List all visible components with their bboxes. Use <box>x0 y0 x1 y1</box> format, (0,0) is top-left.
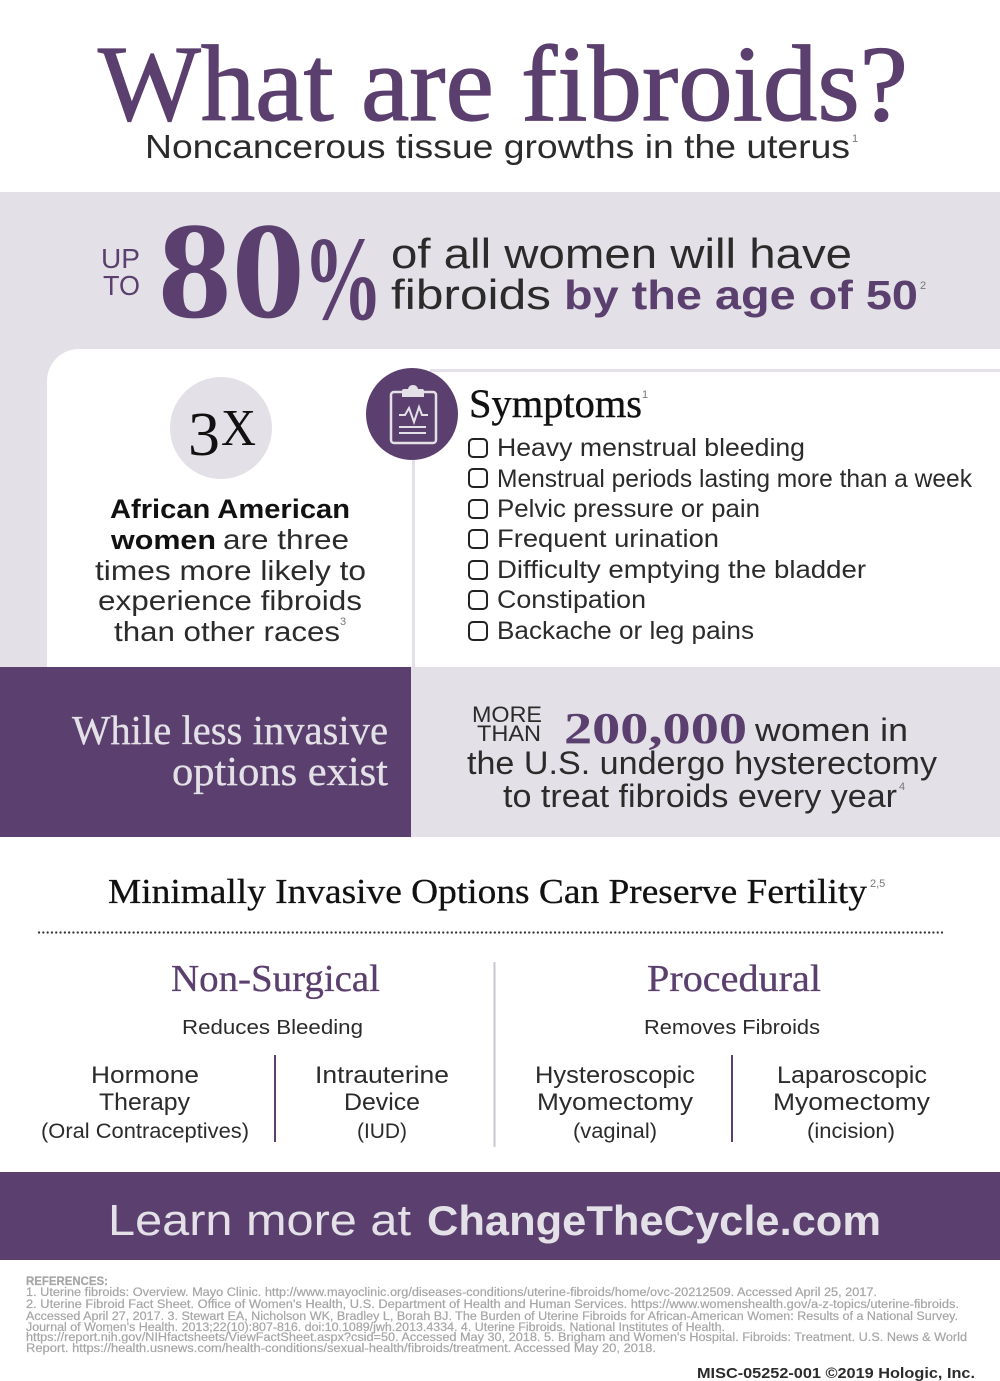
panel: hysterectomy statistic: MORE <box>472 702 542 727</box>
subtitle: Noncancerous tissue growths in the uterus <box>145 128 850 165</box>
option: hysteroscopic myomectomy: (vaginal) <box>573 1120 657 1143</box>
panel: call to action banner: Learn more at <box>108 1196 411 1245</box>
icon: 3X badge: X <box>221 400 256 457</box>
panel: call to action banner: ChangeTheCycle.com <box>427 1197 881 1244</box>
option: hormone therapy <box>41 1062 249 1143</box>
heading: minimally invasive options: 2,5 <box>870 878 885 890</box>
option: laparoscopic myomectomy: (incision) <box>807 1120 895 1143</box>
option: laparoscopic myomectomy <box>773 1062 930 1143</box>
panel: hysterectomy statistic: 200,000 <box>564 704 747 753</box>
subtitle: 1 <box>852 133 858 145</box>
option: laparoscopic myomectomy: Myomectomy <box>773 1089 930 1116</box>
panel: African American statistic <box>95 377 366 647</box>
panel: hysterectomy statistic: THAN <box>477 721 541 746</box>
text block: references: Accessed April 27, 2017. 3. Stewart EA, Nicholson WK, Bradley L, Borah BJ. The Burden of Uterine Fibroids for African-American Women: Results of a National Survey. <box>26 1311 958 1323</box>
text block: three times more likely: experience fibroids <box>98 585 362 616</box>
checklist: symptoms: Menstrual periods lasting more than a week <box>497 465 972 493</box>
panel: hysterectomy statistic <box>411 667 1000 837</box>
heading: symptoms: Symptoms <box>469 381 642 426</box>
checklist: symptoms: Pelvic pressure or pain <box>497 495 760 523</box>
panel: 80 percent statistic: of all women will have <box>391 230 852 277</box>
panel: procedural options: Procedural <box>647 958 821 1000</box>
option: hysteroscopic myomectomy: Hysteroscopic <box>535 1062 695 1089</box>
option: hysteroscopic myomectomy <box>535 1062 695 1143</box>
panel: 80 percent statistic: UP <box>101 243 140 274</box>
panel: 80 percent statistic: fibroids <box>391 271 551 318</box>
panel: less invasive options: While less invasive <box>72 707 388 753</box>
option: hormone therapy: Hormone <box>91 1062 199 1089</box>
text block: references: Report. https://health.usnews.com/health-conditions/sexual-health/fibroids/treatment. Accessed May 20, 2018. <box>26 1343 656 1355</box>
text block: references: 1. Uterine fibroids: Overview. Mayo Clinic. http://www.mayoclinic.org/diseases-conditions/uterine-fibroids/home/ovc-20212509. Accessed April 25, 2017. <box>26 1287 877 1299</box>
text block: three times more likely: times more likely to <box>95 555 366 586</box>
option: laparoscopic myomectomy: Laparoscopic <box>777 1062 927 1089</box>
panel: procedural options <box>535 958 930 1143</box>
panel: 80 percent statistic: TO <box>103 270 140 301</box>
option: intrauterine device: (IUD) <box>357 1120 407 1143</box>
icon: 3X badge <box>170 377 272 479</box>
text block: three times more likely: 3 <box>340 616 346 628</box>
heading: symptoms: 1 <box>642 389 648 401</box>
panel: grey statistics background <box>0 192 1000 667</box>
panel: hysterectomy statistic: the U.S. undergo hysterectomy <box>467 745 937 781</box>
panel: call to action banner <box>0 1172 1000 1260</box>
icon: clipboard with heartbeat <box>366 368 458 460</box>
text block: references: REFERENCES: <box>26 1276 108 1288</box>
text block: three times more likely: women <box>110 525 216 555</box>
text block: three times more likely: than other races <box>114 616 340 647</box>
option: intrauterine device: Intrauterine <box>315 1062 449 1089</box>
panel: 80 percent statistic: 80 <box>158 194 305 347</box>
checklist: symptoms: Backache or leg pains <box>497 617 754 645</box>
text block: references: 2. Uterine Fibroid Fact Sheet. Office of Women's Health, U.S. Department of Health and Human Services. https://www.womenshealth.gov/a-z-topics/uterine-fibroids. <box>26 1299 959 1311</box>
text block: references <box>26 1276 967 1355</box>
panel: non-surgical options: Reduces Bleeding <box>182 1017 363 1039</box>
panel: procedural options: Removes Fibroids <box>644 1017 820 1039</box>
text block: three times more likely: African American <box>110 494 350 524</box>
checklist: symptoms <box>469 434 972 645</box>
text block: references: Journal of Women's Health. 2013;22(10):807-816. doi:10.1089/jwh.2013.4334. 4. Uterine Fibroids. National Institutes of Health. <box>26 1322 725 1334</box>
panel: hysterectomy statistic: women in <box>754 712 908 748</box>
option: hysteroscopic myomectomy: Myomectomy <box>537 1089 693 1116</box>
text block: three times more likely: are three <box>223 524 349 555</box>
panel: 80 percent statistic: by the age of 50 <box>564 272 918 318</box>
panel: white card <box>47 349 1000 667</box>
panel: hysterectomy statistic: 4 <box>899 781 905 793</box>
panel: 80 percent statistic: 2 <box>920 280 926 292</box>
panel: 80 percent statistic <box>101 194 926 347</box>
icon: 3X badge: 3 <box>188 401 220 469</box>
checklist: symptoms: Heavy menstrual bleeding <box>497 434 805 462</box>
checklist: symptoms: Frequent urination <box>497 525 719 553</box>
option: intrauterine device: Device <box>344 1089 420 1116</box>
title: What are fibroids? <box>98 25 908 144</box>
option: hormone therapy: (Oral Contraceptives) <box>41 1120 249 1143</box>
panel: less invasive options <box>0 667 411 837</box>
option: intrauterine device <box>315 1062 449 1143</box>
panel: non-surgical options <box>41 958 449 1143</box>
option: hormone therapy: Therapy <box>99 1089 190 1116</box>
panel: less invasive options: options exist <box>172 748 389 794</box>
text block: three times more likely <box>95 494 366 647</box>
checklist: symptoms: Constipation <box>497 586 646 614</box>
panel: 80 percent statistic: % <box>303 212 383 345</box>
heading: minimally invasive options: Minimally Invasive Options Can Preserve Fertility <box>108 872 868 911</box>
panel: hysterectomy statistic: to treat fibroids every year <box>503 778 897 814</box>
panel: symptoms <box>366 368 972 645</box>
panel: non-surgical options: Non-Surgical <box>171 958 380 1000</box>
text block: references: https://report.nih.gov/NIHfactsheets/ViewFactSheet.aspx?csid=50. Accessed May 30, 2018. 5. Brigham and Women's Hospital. Fibroids: Treatment. U.S. News & World <box>26 1332 967 1344</box>
checklist: symptoms: Difficulty emptying the bladder <box>497 556 866 584</box>
